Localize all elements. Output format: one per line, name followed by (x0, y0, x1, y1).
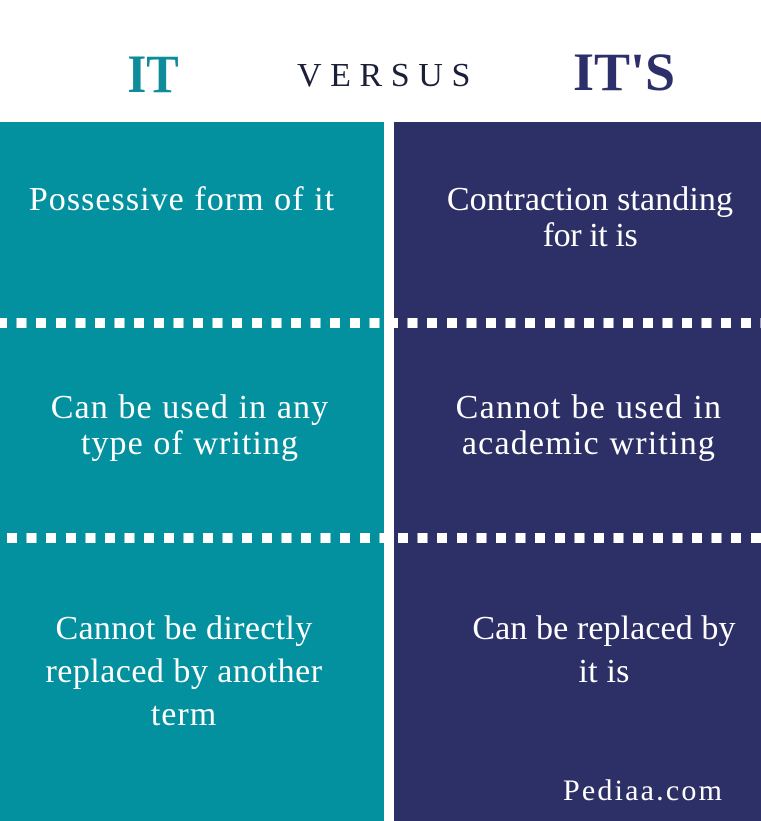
text: IT row 3: term (151, 696, 217, 733)
divider row 2 right (398, 533, 761, 543)
text: IT'S row 1: for it is (543, 217, 637, 254)
text: IT'S row 2 (456, 389, 722, 462)
heading: IT'S: IT'S (573, 42, 675, 102)
text: IT'S row 1 (447, 181, 733, 254)
divider row 2 left (7, 533, 384, 543)
text: IT row 2: Can be used in any (51, 389, 329, 426)
panel: IT'S column (394, 122, 761, 821)
text: IT'S row 3: Can be replaced by (472, 610, 736, 647)
text: IT row 1: Possessive form of it (29, 181, 335, 218)
text: IT'S row 1: Contraction standing (447, 181, 733, 218)
text: IT row 2 (51, 389, 329, 462)
divider row 1 left (0, 318, 384, 328)
text: IT'S row 2: Cannot be used in (456, 389, 722, 426)
text: IT'S row 2: academic writing (462, 425, 716, 462)
heading: IT: IT (127, 44, 179, 104)
text: IT row 3: replaced by another (45, 653, 322, 690)
text: IT row 3 (45, 610, 322, 733)
text: IT row 3: Cannot be directly (55, 610, 313, 647)
text: IT'S row 3 (472, 610, 736, 690)
divider row 1 right (388, 318, 761, 328)
logo: Pediaa.com: Pediaa.com (563, 774, 724, 807)
panel: IT column (0, 122, 384, 821)
text: IT'S row 3: it is (578, 653, 630, 690)
text: IT row 2: type of writing (81, 425, 299, 462)
heading: VERSUS: VERSUS (297, 57, 479, 94)
